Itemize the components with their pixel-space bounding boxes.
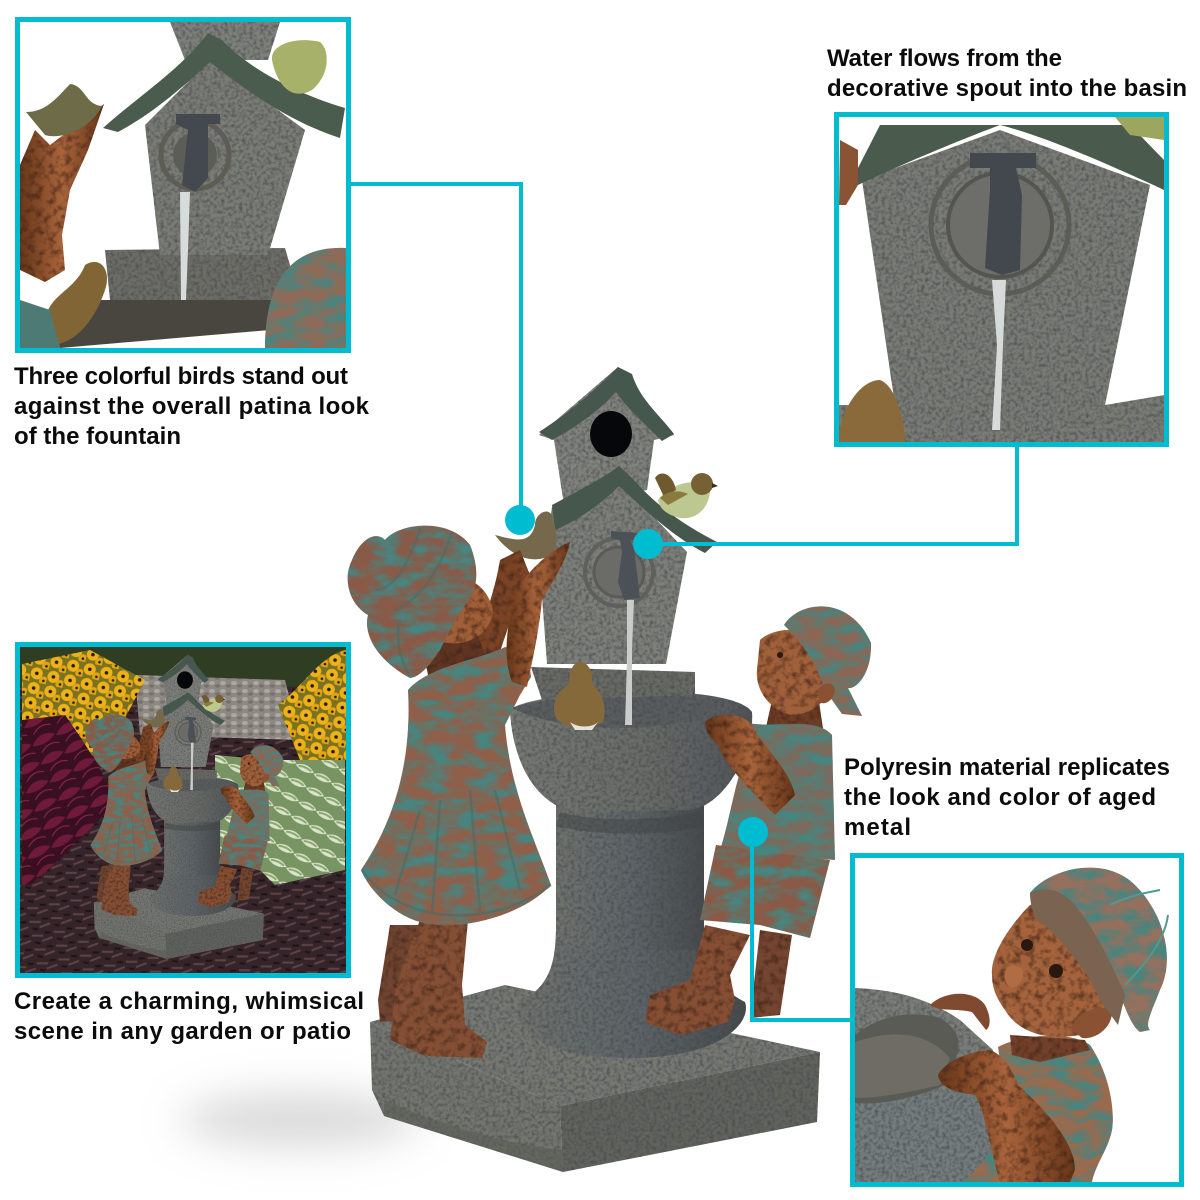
- mulch ground: [20, 687, 346, 973]
- stones bed: [135, 675, 300, 740]
- panel: birds close-up: [18, 20, 348, 350]
- caption: garden: Create a charming, whimsical: [14, 988, 364, 1015]
- caption: material: metal: [844, 814, 911, 841]
- caption: garden: scene in any garden or patio: [14, 1018, 351, 1045]
- caption: spout: Water flows from the: [827, 45, 1062, 72]
- ground shadow: [180, 1092, 420, 1148]
- panel: boy close-up: [852, 856, 1182, 1184]
- foliage backdrop: [20, 647, 346, 687]
- caption: birds: against the overall patina look: [14, 393, 370, 420]
- connector: birds callout: [351, 184, 521, 520]
- caption: spout: [827, 45, 1187, 102]
- panel: garden scene: [18, 644, 348, 976]
- caption: material: Polyresin material replicates: [844, 754, 1170, 781]
- caption: birds: Three colorful birds stand out: [14, 363, 348, 390]
- caption: spout: decorative spout into the basin: [827, 75, 1187, 102]
- caption: birds: [14, 363, 370, 450]
- caption: garden: [14, 988, 364, 1045]
- marker dot: spout: [633, 529, 663, 559]
- panel: spout close-up: [836, 114, 1166, 445]
- marker dot: birds: [505, 505, 535, 535]
- connector: material callout: [752, 832, 850, 1020]
- caption: birds: of the fountain: [14, 423, 181, 450]
- connector: spout callout: [648, 447, 1017, 544]
- caption: material: the look and color of aged: [844, 784, 1156, 811]
- caption: material: [844, 754, 1170, 841]
- central fountain: [348, 367, 871, 1172]
- marker dot: material: [738, 817, 768, 847]
